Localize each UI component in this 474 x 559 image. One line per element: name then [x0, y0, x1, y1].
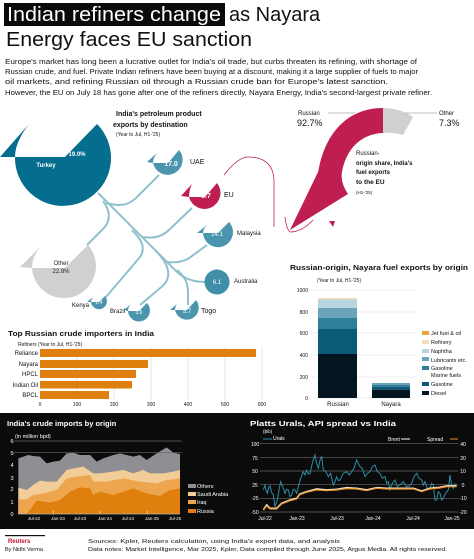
horizontal bar chart: top Russian crude importers in India	[8, 329, 266, 408]
bar: Russian-origin	[318, 298, 357, 398]
line chart heading: Platts Urals, API spread vs India	[250, 419, 397, 428]
area chart axes: Jan-25	[145, 516, 159, 521]
refiner labels: Reliance	[15, 351, 39, 357]
stacked chart legend: Gasoline	[431, 382, 453, 388]
orange bars	[40, 349, 256, 399]
footer credit	[5, 535, 45, 553]
bubble: Other	[20, 245, 96, 298]
donut label: Other: 7.3%	[439, 118, 460, 128]
bubble: Togo	[170, 300, 216, 320]
refiner labels	[13, 351, 39, 399]
stacked bar chart: Russian oil and Nayara exports: 1000	[297, 288, 308, 294]
value axis labels: 0	[39, 402, 42, 408]
line chart axes: Jan-24	[365, 516, 381, 522]
area chart: India's crude imports by origin	[7, 419, 229, 521]
stacked bar chart: Russian oil and Nayara exports: 600	[300, 331, 308, 337]
line chart: Platts Urals vs API	[250, 419, 467, 522]
area chart legend: Russia	[197, 509, 215, 515]
bubble: UAE: 17.0	[164, 161, 178, 168]
stacked chart legend	[422, 331, 467, 397]
area chart heading: (in million bpd)	[15, 434, 51, 440]
line chart axes: 50	[252, 469, 258, 475]
bubble: Malaysia: Malaysia	[237, 231, 261, 237]
tree heading: India's petroleum product	[116, 111, 202, 118]
value axis labels: 600	[258, 402, 266, 408]
stacked chart heading: Russian-origin, Nayara fuel exports by origin	[290, 265, 468, 272]
footer credit: By Nidhi Verma	[5, 547, 44, 553]
line chart axes: 20	[460, 456, 466, 462]
bubble: Brazil	[110, 303, 150, 322]
line chart heading: ($/b)	[263, 429, 273, 434]
line chart axes: Jul-22	[258, 516, 272, 522]
bubble: largest destination: Turkey	[36, 163, 56, 169]
bubble: Australia: 6.1	[213, 280, 222, 286]
bubble: Brazil: Brazil	[110, 309, 125, 315]
line legend: Spread	[427, 437, 443, 443]
bar labels: Nayara	[381, 402, 401, 408]
intro text: Europe's market has long been a lucrative outlet for India's oil trade, but curbs threaten its refining, with shortage of	[5, 59, 417, 66]
stacked bar chart: Russian oil and Nayara exports: 0	[305, 396, 308, 402]
area chart legend	[188, 484, 229, 515]
intro text: oil markets, and refining Russian oil through a Russian crude ban for Europe's latest sanction.	[5, 79, 388, 86]
stacked bar chart: Russian oil and Nayara exports: 800	[300, 310, 308, 316]
bar chart heading	[8, 329, 155, 348]
area chart heading: India's crude imports by origin	[7, 419, 117, 428]
line legend: Urals	[273, 436, 285, 442]
value axis labels: 200	[110, 402, 118, 408]
tree heading: (Year to Jul, H1-'25)	[116, 132, 160, 138]
line chart axes: 75	[252, 456, 258, 462]
area chart legend: Others	[197, 484, 214, 490]
line chart axes	[251, 442, 467, 522]
bubble: Malaysia: 14.1	[211, 232, 223, 238]
line chart axes: 40	[460, 442, 466, 448]
intro text: However, the EU on July 18 has gone after one of the refiners directly, Nayara Energy, India's second-largest private refiner.	[5, 90, 432, 97]
line chart axes: Jan-23	[289, 516, 305, 522]
line chart axes: 25	[252, 483, 258, 489]
stacked chart legend: Jet fuel & oil	[431, 331, 461, 337]
area chart axes: 3	[10, 476, 14, 482]
line legend	[263, 436, 458, 443]
grid lines and axis labels	[310, 290, 417, 398]
stacked chart heading: (Year to Jul, H1-'25)	[317, 278, 361, 284]
value axis labels: 500	[221, 402, 229, 408]
line chart heading	[250, 419, 397, 434]
area chart axes: Jul-22	[28, 516, 41, 521]
donut caption: (H1-'25)	[356, 190, 373, 195]
bubble: largest destination	[0, 124, 111, 206]
bubble: largest destination: 19.0%	[68, 152, 86, 158]
footer sources	[88, 539, 448, 553]
area chart axes: Jul-23	[74, 516, 87, 521]
donut caption: Russian-	[356, 151, 380, 157]
area chart axes: 0	[10, 512, 14, 518]
bubble: Australia	[204, 270, 258, 294]
bubble: Brazil: 3.6	[136, 310, 143, 316]
area chart heading	[7, 419, 117, 440]
intro text: Russian crude, and fuel. Private Indian refiners have been buying at a discount, making it a large supplier of fuels to major	[5, 69, 419, 76]
donut label: Russian	[297, 111, 323, 128]
line chart axes: -10	[459, 496, 467, 502]
area chart axes: Jan-24	[98, 516, 112, 521]
line chart axes: -20	[459, 510, 467, 516]
donut label: Russian: Russian	[298, 111, 320, 117]
value axis labels	[39, 402, 266, 408]
value axis labels: 300	[147, 402, 155, 408]
bubble: Malaysia	[197, 222, 261, 247]
bar labels: Russian	[327, 402, 349, 408]
area chart axes: Jul-25	[169, 516, 182, 521]
area chart axes: Jul-24	[122, 516, 135, 521]
donut: Russian share of exports to EU	[290, 108, 460, 230]
line chart axes: -25	[251, 496, 259, 502]
tree heading	[113, 111, 202, 138]
area chart axes: 2	[10, 487, 14, 493]
stacked chart heading	[290, 265, 468, 284]
stacked chart legend: Diesel	[431, 391, 446, 397]
area chart axes: 5	[10, 451, 14, 457]
bubble: EU	[181, 183, 234, 209]
stacked chart legend: Naphtha	[431, 349, 453, 355]
bubble: Kenya: 2.4	[96, 300, 103, 306]
bar: Nayara	[372, 383, 410, 398]
donut caption: origin share, India's	[356, 161, 413, 167]
stacked chart legend: Marine fuels	[431, 373, 461, 379]
line chart axes: Jan-25	[444, 516, 460, 522]
title	[4, 3, 321, 51]
title: Energy faces EU sanction	[6, 29, 252, 51]
bubble: Togo: Togo	[201, 308, 216, 315]
areas	[13, 441, 182, 514]
stacked chart legend: Gasoline	[431, 366, 453, 372]
refiner labels: Indian Oil	[13, 383, 38, 389]
connector arrow from EU bubble to donut	[224, 157, 335, 232]
footer sources: Sources: Kpler, Reuters calculation, using India's export data, and analysis	[88, 539, 340, 545]
refiner labels: BPCL	[22, 393, 39, 399]
donut caption: fuel exports	[356, 170, 391, 176]
bubble: EU: EU	[224, 192, 234, 199]
bubble: Kenya	[72, 296, 107, 309]
donut label: Russian: 92.7%	[297, 118, 323, 128]
stacked bar chart: Russian oil and Nayara exports: 200	[300, 375, 308, 381]
dark panel background	[0, 413, 474, 529]
area chart axes: 6	[10, 439, 14, 445]
line legend: Brent	[388, 437, 401, 443]
donut caption: to the EU	[356, 179, 385, 186]
line chart axes: 0	[462, 483, 465, 489]
bar chart heading: Top Russian crude importers in India	[8, 329, 155, 338]
area chart axes	[10, 439, 182, 521]
bubble: Kenya: Kenya	[72, 303, 90, 309]
bubble: EU: 9.7	[201, 193, 211, 200]
stacked bar chart: Russian oil and Nayara exports: 400	[300, 353, 308, 359]
plot lines	[260, 444, 458, 512]
intro text	[5, 59, 432, 97]
bubble: Australia: Australia	[234, 279, 258, 285]
area chart legend: Iraq	[197, 500, 206, 506]
stacked bar chart: Russian oil and Nayara exports	[290, 265, 468, 408]
area chart axes: 4	[10, 463, 14, 469]
line chart axes: -50	[251, 510, 259, 516]
chart: petroleum exports by destination tree	[0, 111, 261, 322]
donut caption	[356, 151, 413, 195]
footer sources: Data notes: Market Intelligence, Mar 2025, Kpler, Data compiled through June 2025, Argus Media. All rights reserved.	[88, 547, 448, 553]
donut label: Other	[439, 111, 460, 128]
area chart axes: 1	[10, 500, 14, 506]
stacked chart legend: Lubricants etc.	[431, 358, 467, 364]
area chart axes: Jan-23	[51, 516, 65, 521]
donut label: Other: Other	[439, 111, 454, 117]
stacked chart legend: Refinery	[431, 340, 452, 346]
bar chart heading: Refiners (Year to Jul, H1-'25)	[18, 342, 82, 348]
bubble: UAE: UAE	[190, 159, 205, 166]
tree heading: exports by destination	[113, 122, 188, 129]
footer credit: Reuters	[8, 539, 31, 545]
title: as Nayara	[229, 4, 321, 26]
bubble: Other: 22.8%	[52, 269, 70, 275]
tree branches	[87, 175, 207, 305]
line chart axes: Jul-24	[406, 516, 420, 522]
refiner labels: HPCL	[22, 372, 39, 378]
donut connector lines	[328, 112, 437, 114]
area chart legend: Saudi Arabia	[197, 492, 229, 498]
title: Indian refiners change	[7, 4, 221, 26]
refiner labels: Nayara	[19, 362, 39, 368]
bubble: Togo: 5.7	[183, 309, 192, 315]
line chart axes: 10	[460, 469, 466, 475]
bubble: Other: Other	[53, 261, 69, 267]
line chart axes: 100	[251, 442, 259, 448]
bubble: UAE	[147, 150, 205, 175]
value axis labels: 100	[73, 402, 81, 408]
line chart axes: Jul-23	[330, 516, 344, 522]
bar labels	[327, 402, 401, 408]
value axis labels: 400	[184, 402, 192, 408]
